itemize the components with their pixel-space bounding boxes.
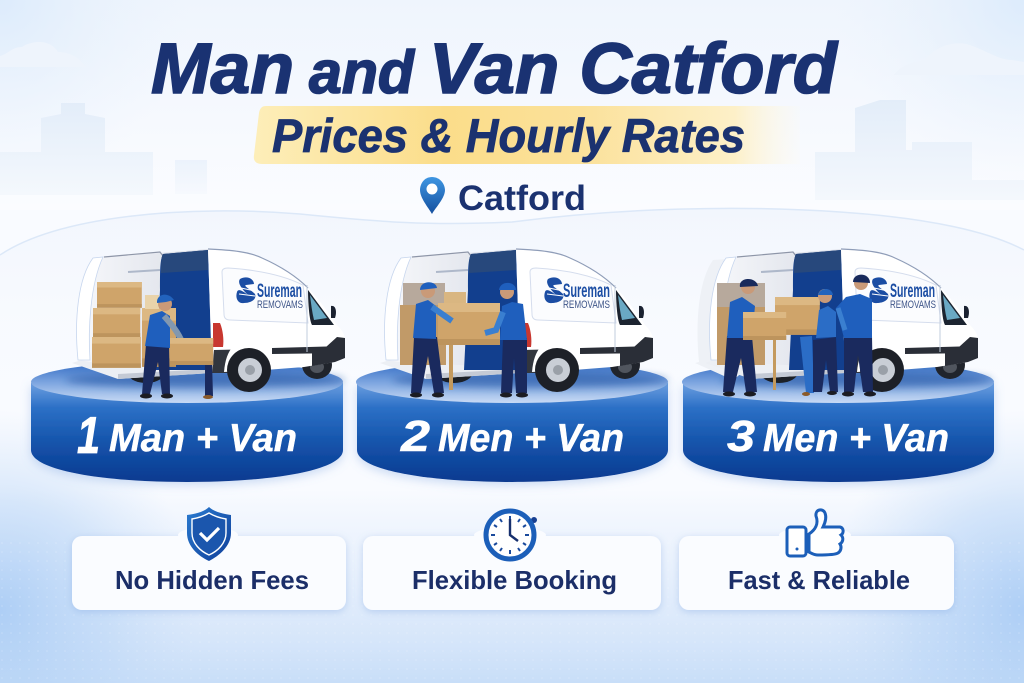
card: fast & reliable: Fast & Reliable xyxy=(728,565,910,595)
title: and xyxy=(309,39,415,106)
van 1: REMOVAMS xyxy=(257,299,303,311)
van 2 xyxy=(380,249,653,392)
cardboard boxes held xyxy=(743,297,820,390)
background skyline left xyxy=(0,103,207,195)
cloud left xyxy=(0,42,86,67)
van 3 xyxy=(695,249,978,392)
subtitle: Prices & Hourly Rates xyxy=(272,109,745,162)
icon: clock xyxy=(486,511,537,559)
panel: 3 men + van xyxy=(682,249,994,482)
location label: Catford xyxy=(458,179,586,218)
mover 3 middle xyxy=(800,289,838,396)
platform 3 xyxy=(682,361,994,482)
cloud right xyxy=(894,43,1024,75)
panel: 1 man + van xyxy=(31,249,345,482)
platform label 1: 1 xyxy=(77,407,100,465)
platform label 1 xyxy=(77,407,297,465)
card: no hidden fees: No Hidden Fees xyxy=(115,565,309,595)
cardboard boxes held xyxy=(438,292,500,390)
platform 1 xyxy=(31,361,345,482)
panel: 2 men + van xyxy=(356,249,668,482)
curved panel xyxy=(0,208,1024,420)
cardboard boxes xyxy=(92,282,176,368)
icon: thumbs up xyxy=(787,510,843,556)
platform 2 xyxy=(356,361,668,482)
mover 2 right xyxy=(485,283,528,398)
highlight pill xyxy=(254,106,800,164)
title: Man xyxy=(151,30,294,109)
icon: location pin xyxy=(420,177,445,214)
platform label 3: Men + Van xyxy=(763,417,949,460)
platform label 2: Men + Van xyxy=(438,417,624,460)
card: no hidden fees xyxy=(72,507,346,610)
van 1: Sureman xyxy=(257,281,302,302)
card: flexible booking xyxy=(363,511,661,610)
icon: shield xyxy=(187,507,231,561)
mover 1 xyxy=(140,295,213,399)
platform label 1: Man + Van xyxy=(109,417,297,460)
title: Van Catford xyxy=(429,30,839,109)
title xyxy=(151,30,839,109)
mover 2 left xyxy=(410,282,452,398)
van 1 xyxy=(72,249,345,392)
card: flexible booking: Flexible Booking xyxy=(412,565,617,595)
van 3: Sureman xyxy=(890,281,935,302)
platform label 3: 3 xyxy=(727,412,755,461)
platform label 2: 2 xyxy=(400,412,431,461)
mover 3 left xyxy=(723,279,758,396)
card: fast & reliable xyxy=(679,510,954,610)
van 2: REMOVAMS xyxy=(563,299,610,311)
mover 3 right xyxy=(836,275,876,396)
van 2: Sureman xyxy=(563,281,610,302)
van 3: REMOVAMS xyxy=(890,299,936,311)
background skyline right xyxy=(815,100,1024,200)
